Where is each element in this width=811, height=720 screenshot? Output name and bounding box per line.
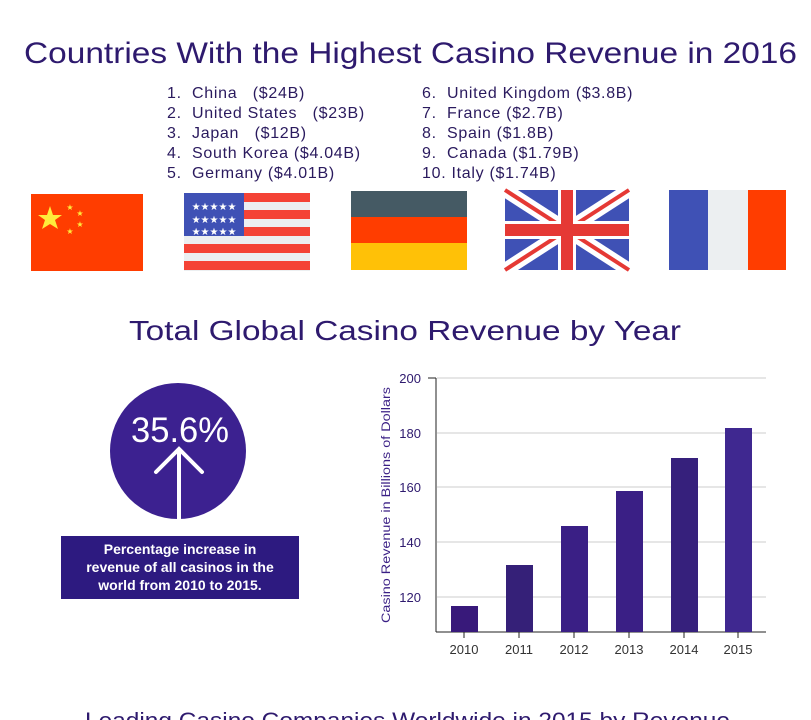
bar chart: 160 (399, 480, 421, 495)
flag: China: ★ (66, 203, 74, 212)
list: countries 1-5: 1. China ($24B) 2. United States ($23B) 3. Japan ($12B) 4. South Korea ($4.04B) 5. Germany ($4.01B) (167, 85, 365, 182)
flag: China: ★ (76, 220, 84, 229)
flag: China: ★ (76, 209, 84, 218)
icon: up arrow (156, 449, 202, 520)
flags (31, 188, 786, 272)
bar chart: 2012 (560, 642, 588, 657)
flag: USA: ★★★★★ (192, 227, 236, 238)
stat circle: 35.6% (131, 411, 229, 450)
flag: China: ★ (66, 227, 74, 236)
callout: caption (61, 536, 299, 599)
flag: USA: ★★★★★ (192, 215, 236, 226)
bar chart: 2014 (670, 642, 698, 657)
bar chart: 2013 (615, 642, 643, 657)
flag: UK (505, 190, 629, 270)
flag: Germany (351, 191, 467, 270)
flag: USA: ★★★★★ (192, 202, 236, 213)
list: countries 6-10: 6. United Kingdom ($3.8B) 7. France ($2.7B) 8. Spain ($1.8B) 9. Canada ($1.79B) 10. Italy ($1.74B) (422, 85, 633, 182)
title: Countries With the Highest Casino Revenue in 2016 (24, 37, 797, 70)
heading: total global revenue: Total Global Casino Revenue by Year (129, 315, 681, 346)
bar chart: 2011 (505, 642, 533, 657)
bar chart: 120 (399, 590, 421, 605)
bar chart: Casino Revenue in Billions of Dollars (381, 387, 393, 623)
bar chart (381, 371, 766, 657)
bar chart: 2015 (724, 642, 752, 657)
flag: USA (184, 193, 310, 271)
bar chart: 200 (399, 371, 421, 386)
flag: China (31, 194, 143, 271)
callout: caption: Percentage increase in revenue of all casinos in the world from 2010 to 2015. (86, 541, 274, 593)
bar chart: 180 (399, 426, 421, 441)
stat circle (110, 383, 246, 519)
flag: France (669, 190, 786, 270)
bar chart: 2010 (450, 642, 478, 657)
bar chart: 140 (399, 535, 421, 550)
